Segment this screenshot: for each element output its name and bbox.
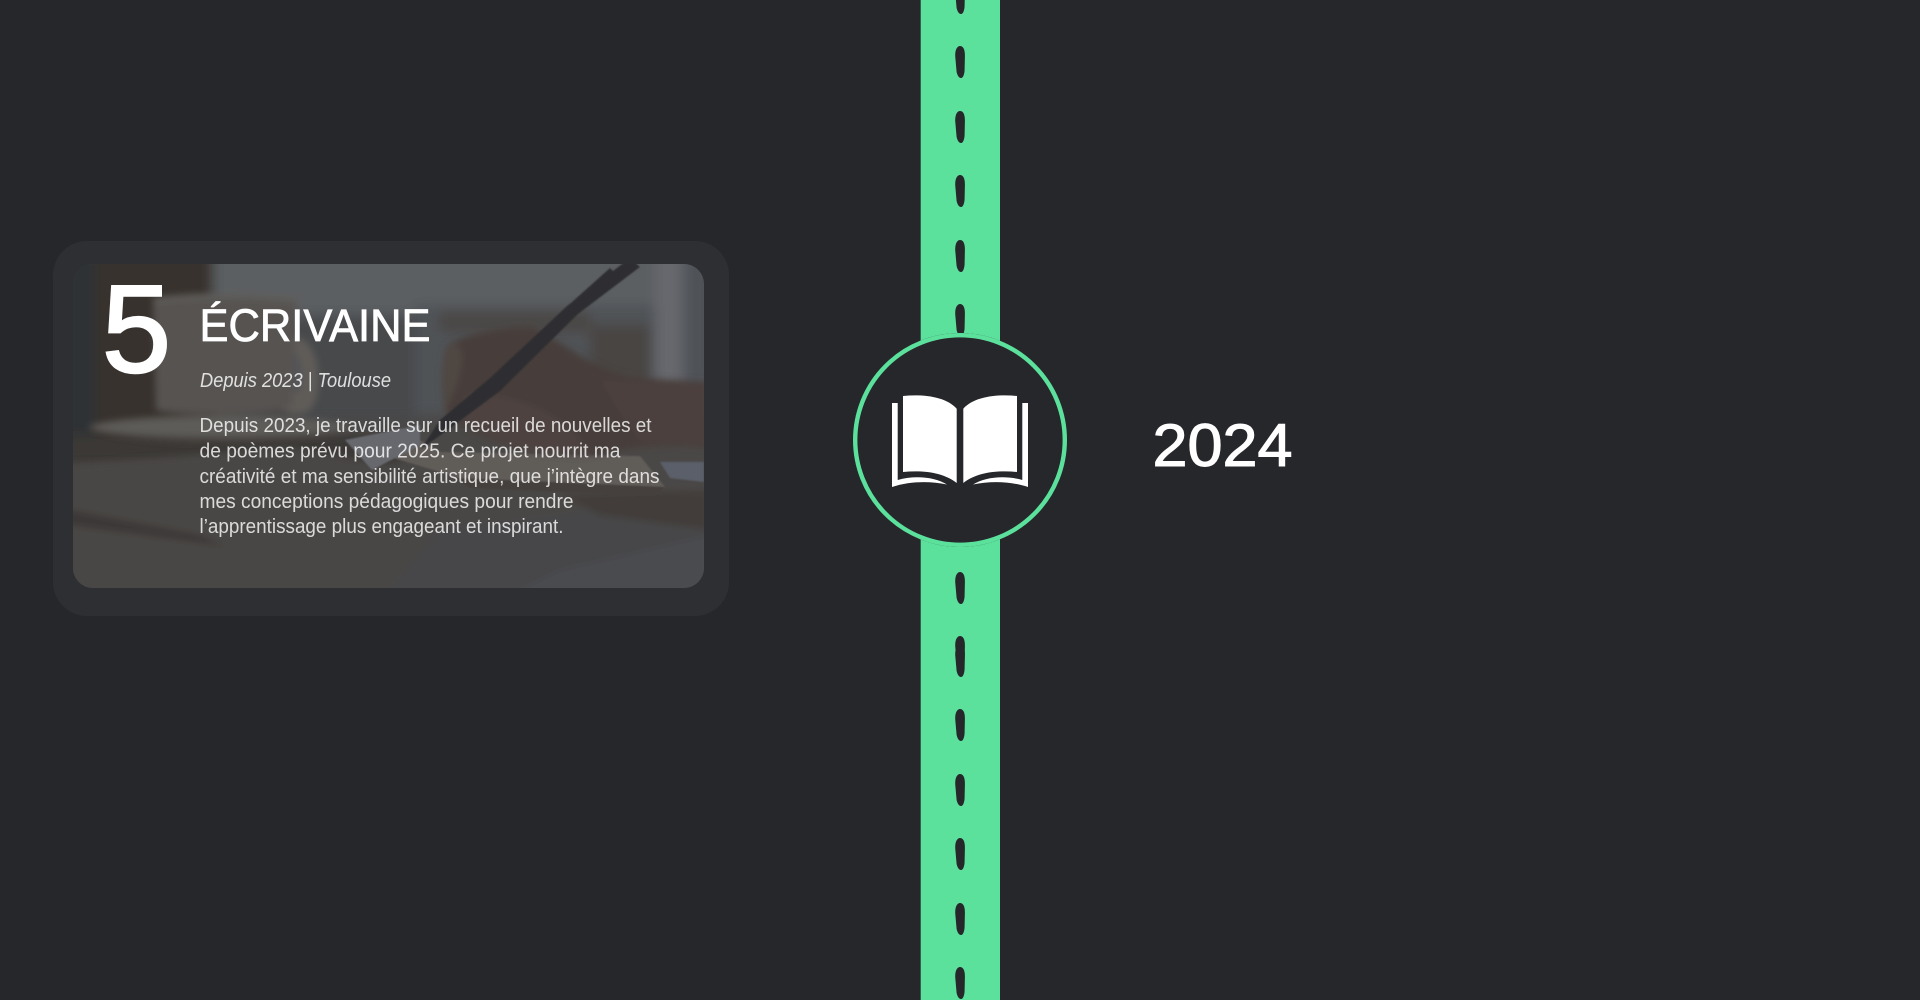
text block (200, 415, 660, 538)
text block: l’apprentissage plus engageant et inspirant. (200, 516, 564, 538)
text block: de poèmes prévu pour 2025. Ce projet nourrit ma (200, 440, 621, 462)
text block: créativité et ma sensibilité artistique, que j’intègre dans (200, 466, 660, 488)
dashed centre line (955, 0, 965, 999)
timeline bar (921, 0, 1000, 1000)
desk and notebooks (73, 448, 704, 588)
hand (442, 327, 710, 456)
icon: open book (892, 395, 1028, 487)
text block: mes conceptions pédagogiques pour rendre (200, 491, 574, 513)
photo: hand writing beside a coffee cup (73, 264, 704, 588)
heading: ÉCRIVAINE (200, 300, 430, 351)
text block: Depuis 2023, je travaille sur un recueil de nouvelles et (200, 415, 652, 437)
cup and saucer (88, 294, 353, 443)
central circle with book icon (853, 333, 1067, 547)
timeline infographic (73, 0, 1292, 1000)
panel: experience card (73, 264, 704, 588)
pen (421, 258, 640, 449)
number: 5 (102, 261, 171, 399)
year label: 2024 (1152, 412, 1292, 479)
subtitle: Depuis 2023 | Toulouse (200, 370, 391, 392)
